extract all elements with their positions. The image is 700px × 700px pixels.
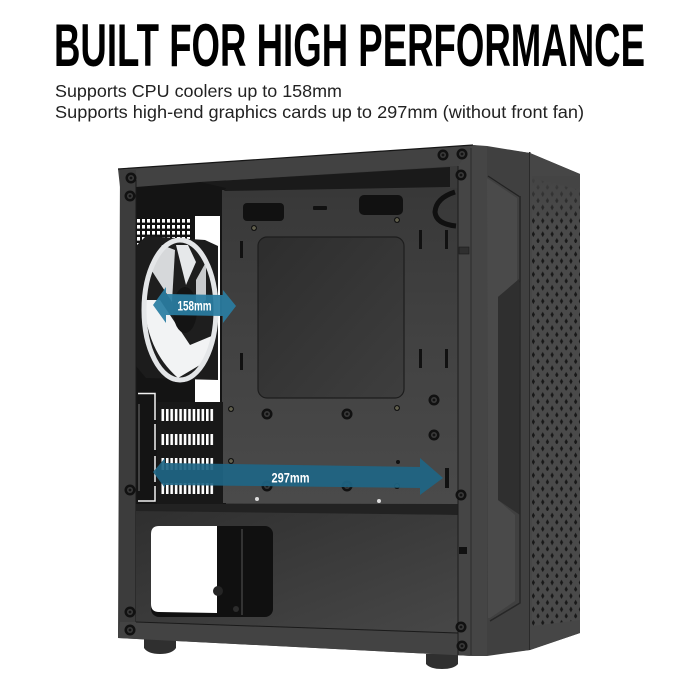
PCI slots — [162, 409, 214, 494]
shroud top band — [136, 504, 458, 515]
motherboard tray — [222, 188, 458, 504]
PSU opening — [151, 526, 273, 617]
case body silhouette — [118, 145, 580, 656]
white bracket lines — [138, 394, 155, 501]
text block: specifications: Supports CPU coolers up to 158mm — [55, 81, 342, 101]
bezel recess — [498, 279, 520, 515]
text block: specifications: Supports high-end graphics cards up to 297mm (without front fan) — [55, 102, 584, 122]
arrow: 158mm cooler clearance — [153, 287, 236, 323]
front clip details — [459, 247, 469, 254]
top rail — [118, 145, 473, 187]
side edge — [529, 152, 530, 650]
rear perforated grid — [136, 218, 191, 278]
screws — [124, 148, 468, 652]
interior dark cavity — [136, 180, 226, 510]
arrow: 297mm graphics card clearance: 297mm — [272, 470, 310, 486]
left post — [120, 170, 136, 636]
bottom rail — [118, 622, 473, 656]
front frame — [458, 145, 487, 656]
bezel raised panel — [487, 178, 517, 618]
text block: specifications — [55, 81, 584, 122]
arrow: 158mm cooler clearance: 158mm — [178, 298, 212, 314]
tray cable cut-outs — [240, 195, 449, 488]
PC case illustration — [118, 145, 580, 669]
PSU shroud — [136, 511, 458, 633]
cable bundle — [435, 192, 456, 226]
foot right — [426, 654, 458, 669]
arrow: 297mm graphics card clearance — [153, 458, 443, 495]
fan — [136, 236, 218, 380]
perforated side panel — [532, 178, 580, 626]
perforation top fade — [532, 176, 580, 226]
foot left — [144, 638, 176, 654]
rear window cut-out — [195, 216, 220, 402]
CPU cut-out — [258, 237, 404, 398]
top mesh band — [200, 167, 450, 191]
front bezel — [487, 146, 530, 656]
PCI bracket area — [156, 402, 223, 506]
